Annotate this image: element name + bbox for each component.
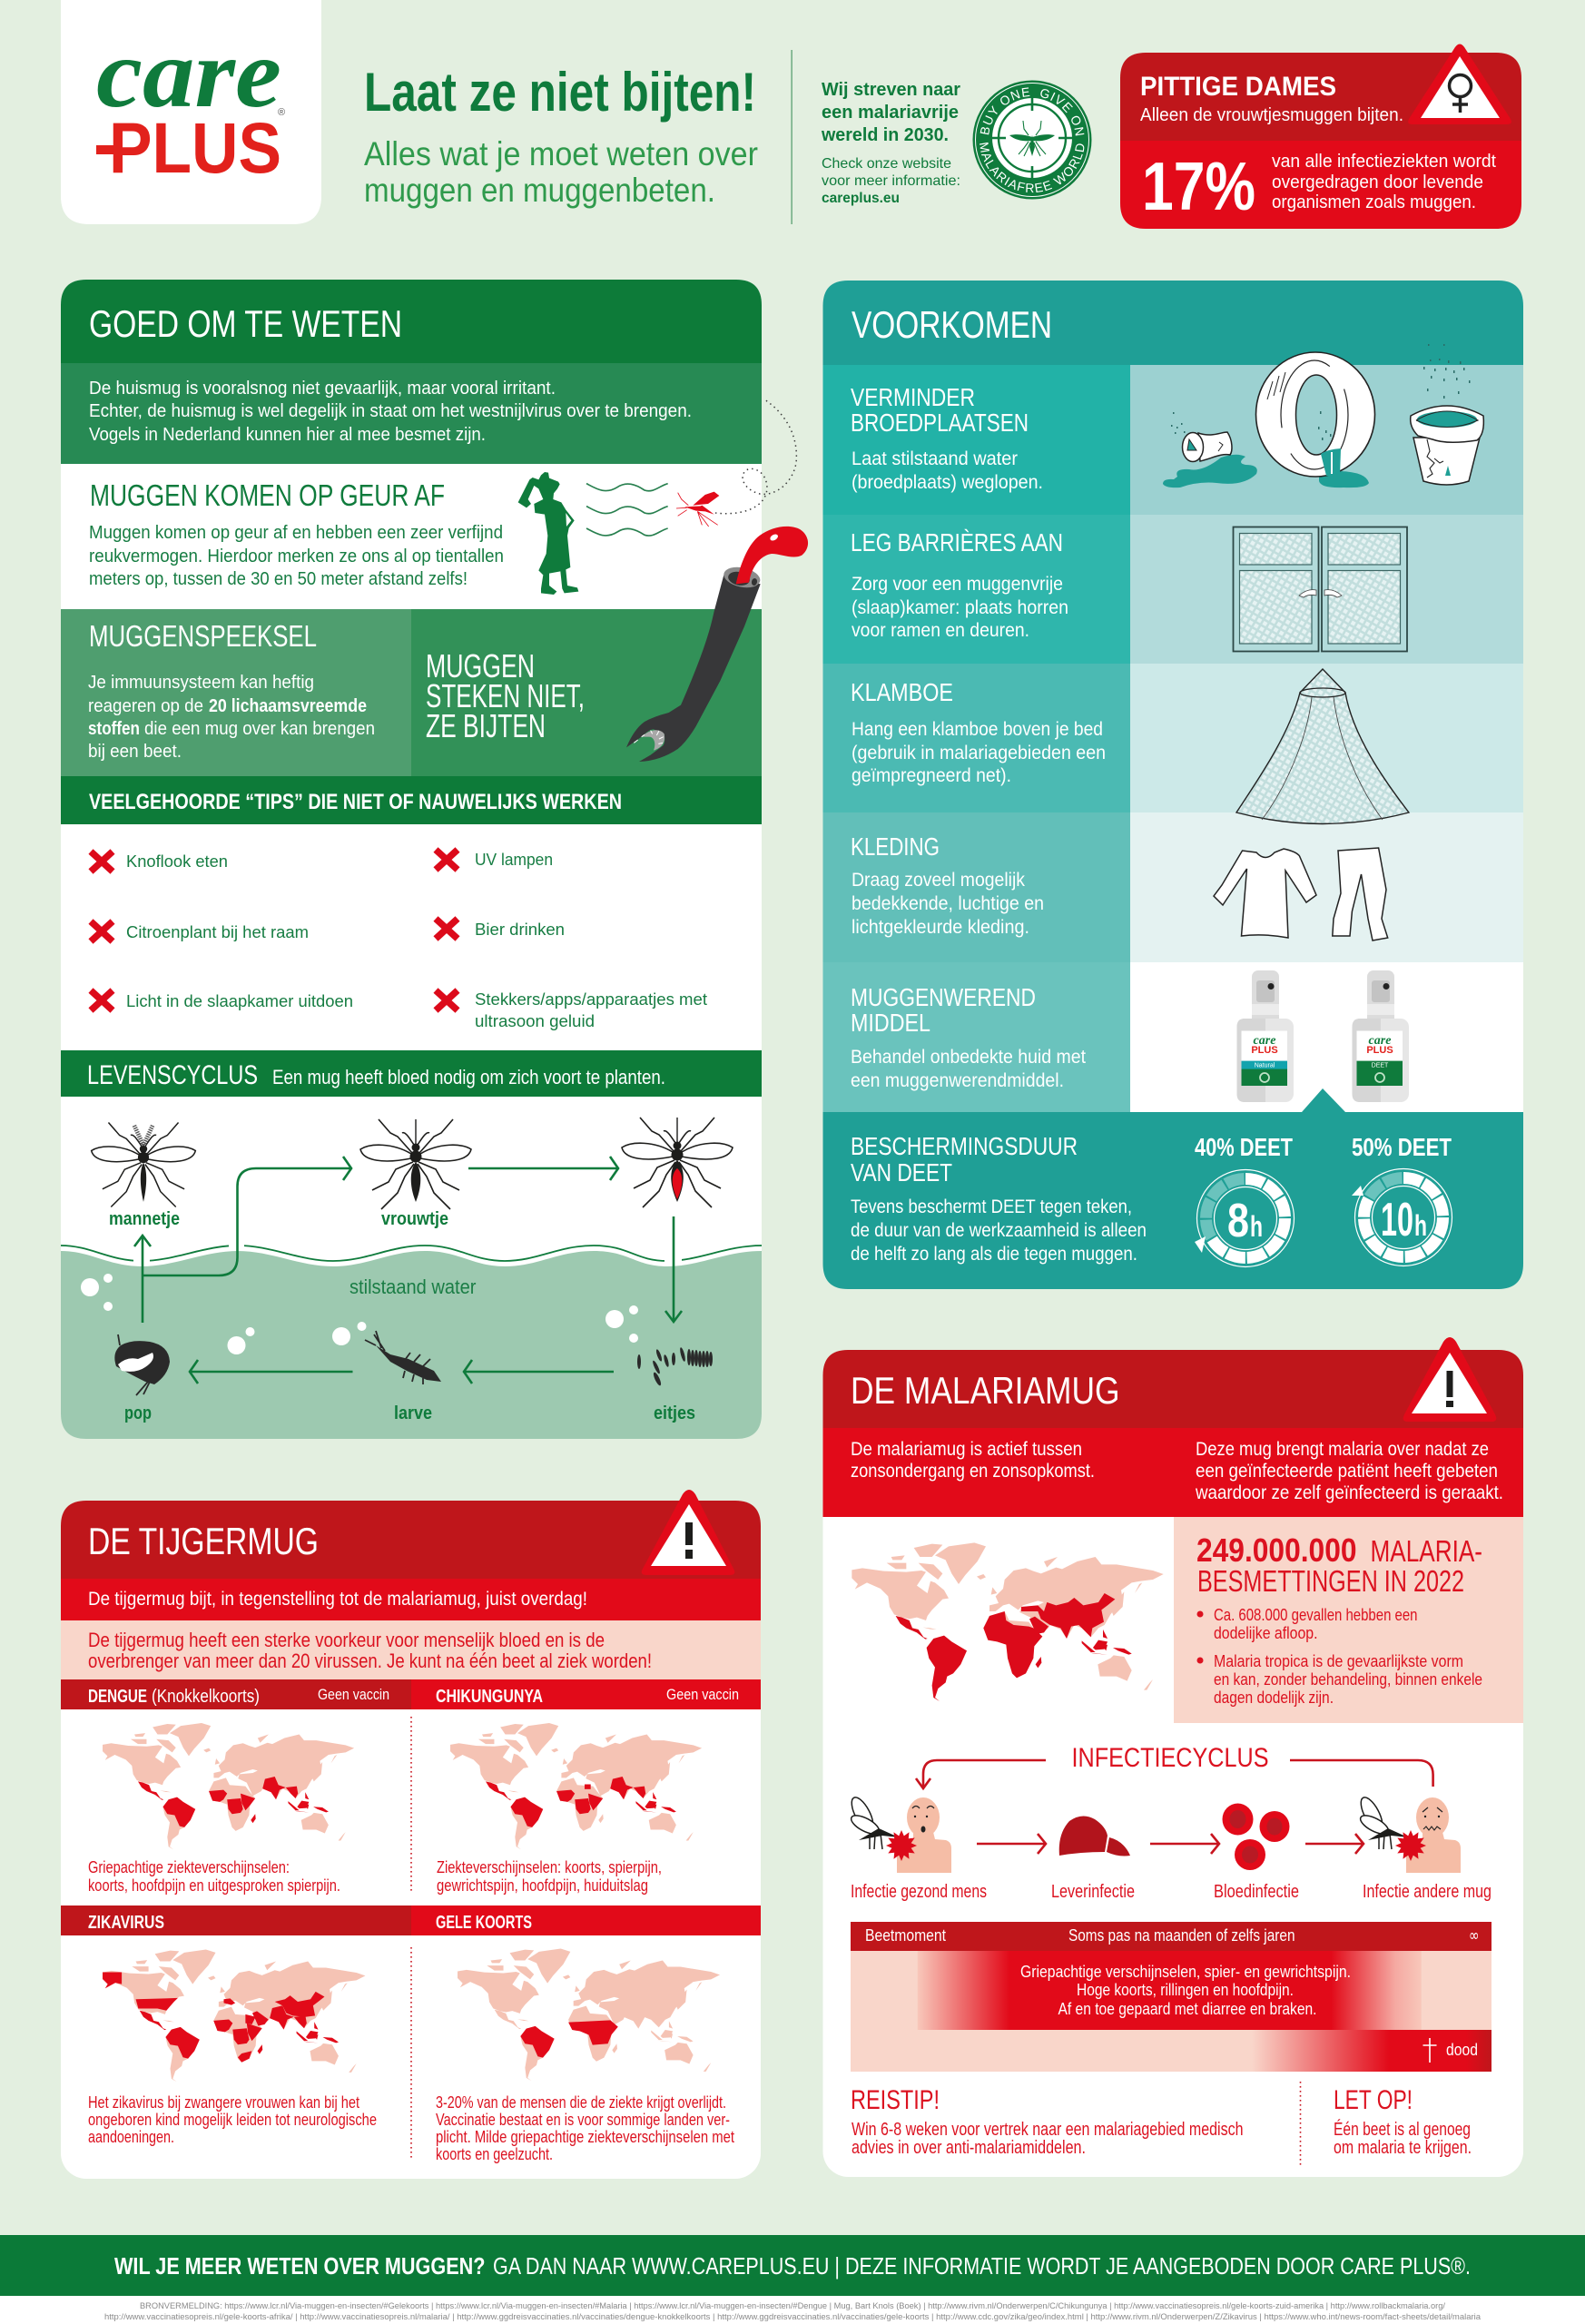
heading: veelgehoorde tips: VEELGEHOORDE “TIPS” DIE NIET OF NAUWELIJKS WERKEN: [89, 790, 622, 814]
disease header: dengue: DENGUE: [88, 1687, 147, 1707]
icon: red crosses: [91, 850, 458, 1010]
text: muggenspeeksel: Je immuunsysteem kan heftig: [88, 673, 314, 693]
stat: 249 million: 249.000.000: [1196, 1531, 1356, 1569]
timeline labels: [865, 1925, 1480, 2059]
text: transmission: [1195, 1439, 1503, 1503]
row: klamboe: geïmpregneerd net).: [852, 765, 1011, 786]
icon: female mosquito: [360, 1119, 471, 1209]
header subtitle: Alles wat je moet weten over: [364, 135, 758, 172]
icon: pupa: [114, 1334, 170, 1395]
icon: sick person bitten: [1357, 1795, 1461, 1873]
row: verminder broedplaatsen: VERMINDER: [851, 383, 975, 411]
text: zika description: aandoeningen.: [88, 2127, 174, 2146]
bullet list: Ca. 608.000 gevallen hebben een: [1214, 1605, 1418, 1624]
map: malaria: [852, 1542, 1164, 1701]
cycle labels: Infectie andere mug: [1363, 1882, 1491, 1902]
disease header: chikungunya: [411, 1679, 761, 1709]
disease header: zikavirus: [61, 1905, 411, 1935]
malaria-free mission text: wereld in 2030.: [821, 125, 949, 145]
malaria-free mission text: Wij streven naar: [822, 80, 960, 100]
list: ineffective tips: Stekkers/apps/apparaatjes met: [475, 990, 707, 1009]
timeline labels: Soms pas na maanden of zelfs jaren: [1068, 1925, 1295, 1945]
heading: de tijgermug: DE TIJGERMUG: [88, 1520, 319, 1562]
text: zika description: ongeboren kind mogelijk leiden tot neurologische: [88, 2110, 377, 2129]
intro text: Echter, de huismug is wel degelijk in staat om het westnijlvirus over te brengen.: [89, 401, 692, 421]
text: reistip: advies in over anti-malariamiddelen.: [852, 2138, 1086, 2158]
icon: blood-fed mosquito: [622, 1118, 733, 1207]
callout: muggen steken niet: MUGGEN: [426, 647, 535, 684]
panel: de malariamug: [822, 1337, 1523, 2177]
list: ineffective tips: Citroenplant bij het raam: [126, 922, 309, 941]
heading: let op: LET OP!: [1334, 2085, 1413, 2115]
text: muggenspeeksel: bij een beet.: [88, 742, 182, 762]
malaria-free mission text: careplus.eu: [822, 191, 900, 206]
subheading: levenscyclus: Een mug heeft bloed nodig om zich voort te planten.: [272, 1066, 665, 1088]
row: beschermingsduur: BESCHERMINGSDUUR: [851, 1132, 1078, 1160]
band: levenscyclus: [61, 1050, 762, 1097]
water surface line: [61, 1246, 762, 1261]
text: muggenspeeksel: stoffen: [88, 719, 140, 739]
bullet list: [1196, 1605, 1482, 1707]
icon: eggs: [637, 1347, 713, 1386]
bullet list: en kan, zonder behandeling, binnen enkele: [1214, 1669, 1482, 1689]
heading: infectiecyclus: INFECTIECYCLUS: [1071, 1743, 1269, 1773]
heading: malaria besmettingen: [1197, 1534, 1482, 1598]
disease header: gele koorts: GELE KOORTS: [436, 1913, 532, 1933]
row: kleding: Draag zoveel mogelijk: [852, 870, 1025, 891]
footer band: [0, 2235, 1585, 2296]
text: yellow fever description: 3-20% van de mensen die de ziekte krijgt overlijdt.: [436, 2093, 726, 2112]
row: klamboe: KLAMBOE: [851, 678, 953, 706]
gauge: 8 hours: 8: [1227, 1195, 1249, 1247]
band: tips heading: [61, 776, 762, 824]
label: mannetje: mannetje: [109, 1209, 180, 1229]
icon: repellent bottle deet: care: [1369, 1034, 1391, 1048]
gauge: 8 hours: h: [1250, 1210, 1263, 1243]
row: kleding: KLEDING: [851, 832, 940, 861]
header title: Laat ze niet bijten!: [364, 62, 756, 123]
icon: male mosquito: [92, 1122, 195, 1207]
gauge: 10 hours: 10: [1381, 1194, 1413, 1246]
malaria-free mission text: een malariavrije: [822, 103, 959, 123]
row: beschermingsduur: de duur van de werkzaamheid is alleen: [851, 1220, 1147, 1241]
text: reistip: [852, 2120, 1244, 2158]
text: yellow fever description: plicht. Milde griepachtige ziekteverschijnselen met: [436, 2127, 734, 2146]
text: geur: reukvermogen. Hierdoor merken ze ons al op tientallen: [89, 547, 504, 566]
list: ineffective tips: UV lampen: [475, 850, 553, 869]
map: dengue: [103, 1723, 354, 1849]
text: geur: Muggen komen op geur af en hebben een zeer verfijnd: [89, 523, 503, 543]
label: larve: larve: [394, 1403, 432, 1423]
text: yellow fever description: Vaccinatie bestaat en is voor sommige landen ver-: [436, 2110, 730, 2129]
header: logo card: [61, 0, 321, 224]
icon: malaria free world badge: [973, 80, 1091, 200]
text: voorkeur: De tijgermug heeft een sterke voorkeur voor menselijk bloed en is de: [88, 1629, 605, 1651]
text: voorkeur: overbrenger van meer dan 20 virussen. Je kunt na één beet al ziek worden!: [88, 1649, 652, 1672]
icon: repellent bottle natural: [1236, 970, 1294, 1102]
band: active hours: [822, 1428, 1523, 1517]
band: muggenspeeksel: [61, 609, 411, 776]
logo word PLUS: PLUS: [109, 107, 281, 188]
heading: voorkomen: VOORKOMEN: [852, 303, 1052, 346]
text: infectieziekten: overgedragen door levende: [1272, 172, 1483, 192]
text: muggenspeeksel: die een mug over kan brengen: [144, 719, 375, 739]
text: transmission: Deze mug brengt malaria over nadat ze: [1196, 1439, 1489, 1460]
text: dengue symptoms: [88, 1857, 340, 1895]
text: zika description: Het zikavirus bij zwangere vrouwen kan bij het: [88, 2093, 359, 2112]
text: geur: meters op, tussen de 30 en 50 meter afstand zelfs!: [89, 569, 468, 589]
bullet list: Malaria tropica is de gevaarlijkste vorm: [1214, 1651, 1463, 1670]
icon: warning sign: [1403, 1337, 1496, 1422]
text: transmission: een geïnfecteerde patiënt heeft gebeten: [1196, 1461, 1498, 1482]
text: transmission: waardoor ze zelf geïnfecteerd is geraakt.: [1195, 1482, 1503, 1503]
icon: repellent bottle deet: DEET: [1372, 1062, 1389, 1069]
bullet list: dodelijke afloop.: [1214, 1623, 1318, 1642]
icon: clothing: [1214, 848, 1388, 940]
row: verminder broedplaatsen: BROEDPLAATSEN: [851, 409, 1029, 437]
icon: repellent bottle deet: [1353, 970, 1409, 1102]
disease header: chikungunya: CHIKUNGUNYA: [436, 1687, 543, 1707]
heading: 50 percent deet: 50% DEET: [1352, 1133, 1452, 1161]
dotted flight path: [715, 399, 796, 514]
cycle labels: [851, 1882, 1491, 1902]
heading: levenscyclus: LEVENSCYCLUS: [87, 1060, 258, 1090]
malaria-free mission text: Check onze website: [822, 156, 951, 172]
timeline death band: [851, 2030, 1491, 2072]
icon: malaria free world badge: MALARIAFREE WORLD: [979, 142, 1084, 192]
panel: malaria stats: [1174, 1517, 1523, 1723]
row: verminder broedplaatsen: [822, 365, 1523, 515]
text: let op: [1334, 2119, 1472, 2158]
icon: window with screens: [1233, 527, 1407, 652]
text: infectieziekten: van alle infectieziekten wordt: [1272, 152, 1496, 172]
map: gele koorts: [458, 1948, 720, 2081]
logo word PLUS: ®: [278, 107, 285, 118]
timeline: [851, 1922, 1491, 2072]
list: ineffective tips: ultrasoon geluid: [475, 1011, 595, 1030]
callout: muggen steken niet: [426, 647, 585, 744]
logo word care: care: [96, 20, 281, 128]
text: active hours: zonsondergang en zonsopkomst.: [851, 1461, 1095, 1482]
disease header: zikavirus: ZIKAVIRUS: [88, 1913, 164, 1933]
timeline labels: Hoge koorts, rillingen en hoofdpijn.: [1077, 1980, 1294, 1999]
cycle labels: Bloedinfectie: [1214, 1882, 1299, 1902]
row: beschermingsduur: VAN DEET: [851, 1158, 952, 1187]
text: dengue symptoms: Griepachtige ziekteverschijnselen:: [88, 1857, 290, 1876]
arrow: [1150, 1834, 1219, 1854]
heading: 40 percent deet: 40% DEET: [1195, 1133, 1293, 1161]
icon: female warning sign: [1408, 44, 1511, 124]
callout: muggen steken niet: ZE BIJTEN: [426, 707, 546, 744]
footer white strip: [0, 2296, 1585, 2324]
label: pop: pop: [124, 1403, 152, 1423]
heading: malaria besmettingen: BESMETTINGEN IN 2022: [1197, 1564, 1464, 1598]
timeline symptoms band: [851, 1951, 1491, 2030]
malaria-free mission text: [821, 80, 960, 206]
disease header: dengue: Geen vaccin: [318, 1686, 389, 1703]
row: leg barrieres aan: [822, 515, 1523, 664]
text: geur: [89, 523, 504, 589]
icon: spilled cup and puddle: [1163, 432, 1257, 487]
text: infectieziekten: [1272, 152, 1496, 212]
row: kleding: [822, 812, 1523, 962]
label: eitjes: eitjes: [654, 1403, 695, 1423]
row: beschermingsduur: [822, 1088, 1523, 1289]
cycle labels: Leverinfectie: [1051, 1882, 1135, 1902]
row: leg barrieres aan: (slaap)kamer: plaats horren: [852, 597, 1068, 618]
sources: http://www.vaccinatiesopreis.nl/gele-koorts-afrika/ | http://www.vaccinatiesopreis.nl/malaria/ | http://www.ggdreisvaccinaties.nl/vaccinaties/dengue-knokkelkoorts | http://www.ggdreisvaccinaties.nl/vaccinaties/gele-koorts | http://www.cdc.gov/zika/geo/index.html | http://www.rivm.nl/Onderwerpen/Z/Zikavirus | https://www.who.int/news-room/fact-sheets/detail/malaria: [104, 2312, 1482, 2322]
header subtitle: [364, 135, 758, 209]
timeline labels: Beetmoment: [865, 1925, 946, 1945]
text: muggenspeeksel: reageren op de: [88, 696, 203, 716]
icon: cross: [1423, 2038, 1436, 2063]
text: yellow fever description: koorts en geelzucht.: [436, 2144, 553, 2163]
timeline labels: Griepachtige verschijnselen, spier- en gewrichtspijn.: [1020, 1962, 1351, 1981]
heading: reistip: REISTIP!: [851, 2085, 940, 2115]
text: voorkeur: [88, 1629, 652, 1672]
footer call to action: WIL JE MEER WETEN OVER MUGGEN?: [114, 2252, 485, 2280]
gauge: 8 hours: [1195, 1169, 1295, 1267]
text: infectieziekten: organismen zoals muggen.: [1272, 192, 1476, 212]
gauge: 10 hours: h: [1414, 1209, 1427, 1242]
row: beschermingsduur: de helft zo lang als die tegen muggen.: [851, 1244, 1137, 1265]
row: muggenwerend middel: een muggenwerendmiddel.: [851, 1070, 1064, 1091]
text: zika description: [88, 2093, 377, 2146]
icon: malaria free world badge: BUY ONE: [980, 87, 1029, 134]
icon: warning sign: [642, 1490, 734, 1575]
gauge: 10 hours: [1352, 1169, 1452, 1265]
disease header: dengue: (Knokkelkoorts): [152, 1687, 260, 1707]
row: kleding: bedekkende, luchtige en: [852, 893, 1044, 914]
disease header: gele koorts: [411, 1905, 761, 1935]
list: ineffective tips: Bier drinken: [475, 920, 565, 939]
map: zikavirus: [103, 1949, 365, 2082]
header band: [61, 1501, 761, 1579]
malaria-free mission text: voor meer informatie:: [822, 173, 960, 189]
text: dengue symptoms: koorts, hoofdpijn en uitgesproken spierpijn.: [88, 1876, 340, 1895]
icon: bed net: [1236, 669, 1409, 824]
text: muggenspeeksel: 20 lichaamsvreemde: [209, 696, 367, 716]
text: chikungunya symptoms: gewrichtspijn, hoofdpijn, huiduitslag: [437, 1876, 648, 1895]
band: overdag: [61, 1579, 761, 1620]
row: muggenwerend middel: Behandel onbedekte huid met: [851, 1047, 1086, 1068]
heading: pittige dames: PITTIGE DAMES: [1140, 72, 1336, 102]
timeline labels: ∞: [1469, 1926, 1480, 1945]
icon: sniffing person: [518, 472, 578, 595]
panel: de tijgermug: [61, 1490, 761, 2179]
row: muggenwerend middel: MUGGENWEREND: [851, 983, 1036, 1011]
icon: repellent bottle natural: PLUS: [1251, 1045, 1278, 1056]
icon: blood cells: [1222, 1803, 1289, 1870]
text: let op: om malaria te krijgen.: [1334, 2138, 1472, 2158]
timeline labels: dood: [1446, 2040, 1478, 2059]
text: active hours: [851, 1439, 1095, 1482]
text: reistip: Win 6-8 weken voor vertrek naar een malariagebied medisch: [852, 2120, 1244, 2140]
intro text: De huismug is vooralsnog niet gevaarlijk, maar vooral irritant.: [89, 379, 556, 399]
stat: 17 percent: 17%: [1142, 148, 1255, 224]
icon: healthy person bitten: [848, 1795, 951, 1873]
text: let op: Één beet is al genoeg: [1334, 2119, 1471, 2140]
icon: repellent bottle natural: care: [1254, 1034, 1275, 1048]
timeline labels: Af en toe gepaard met diarree en braken.: [1058, 1999, 1316, 2018]
row: leg barrieres aan: Zorg voor een muggenvrije: [852, 574, 1063, 595]
row: klamboe: (gebruik in malariagebieden een: [852, 743, 1106, 763]
row: beschermingsduur: Tevens beschermt DEET tegen teken,: [851, 1196, 1132, 1217]
map: chikungunya: [450, 1723, 702, 1849]
band: muggen bijten: [411, 609, 762, 776]
water area: [61, 1251, 762, 1439]
arrow: [1305, 1834, 1363, 1854]
header band: [822, 1350, 1523, 1428]
icon: tyre with water: [1256, 352, 1374, 487]
row: verminder broedplaatsen: Laat stilstaand water: [852, 448, 1018, 469]
label: vrouwtje: vrouwtje: [381, 1209, 448, 1229]
icon: repellent bottle natural: Natural: [1255, 1062, 1275, 1069]
icon: proboscis with blood: [626, 527, 808, 762]
list: ineffective tips: Knoflook eten: [126, 852, 228, 871]
row: leg barrieres aan: LEG BARRIÈRES AAN: [851, 528, 1063, 556]
bubbles: [81, 1274, 638, 1354]
text: muggenspeeksel: [88, 673, 375, 762]
row: klamboe: Hang een klamboe boven je bed: [852, 719, 1103, 740]
intro text: Vogels in Nederland kunnen hier al mee besmet zijn.: [89, 425, 486, 445]
text: chikungunya symptoms: [437, 1857, 662, 1895]
text: vrouwtjesmuggen: Alleen de vrouwtjesmuggen bijten.: [1140, 105, 1403, 125]
sources: [104, 2301, 1482, 2322]
header band: [61, 280, 762, 363]
intro band: [61, 363, 762, 464]
cycle return arrows: [916, 1760, 1433, 1788]
list: ineffective tips: Licht in de slaapkamer uitdoen: [126, 991, 353, 1010]
panel: voorkomen: [822, 281, 1523, 1289]
mosquito swarm dots: [1171, 344, 1471, 440]
row: muggenwerend middel: [822, 962, 1523, 1112]
band: voorkeur: [61, 1620, 761, 1679]
heading: de malariamug: DE MALARIAMUG: [851, 1369, 1120, 1412]
header subtitle: muggen en muggenbeten.: [364, 172, 715, 209]
icon: larva: [365, 1331, 441, 1384]
intro text: [89, 379, 692, 445]
icon: cracked pot with water: [1411, 406, 1483, 485]
row: muggenwerend middel: MIDDEL: [851, 1009, 930, 1037]
disease header: dengue: [61, 1679, 411, 1709]
sources: BRONVERMELDING: https://www.lcr.nl/Via-muggen-en-insecten/#Gelekoorts | https://www.lcr.nl/Via-muggen-en-insecten/#Malaria | https://www.lcr.nl/Via-muggen-en-insecten/#Dengue | Mug, Bart Knols (Boek) | http://www.rivm.nl/Onderwerpen/C/Chikungunya | http://www.vaccinatiesopreis.nl/gele-koorts-zuid-amerika | http://www.rollbackmalaria.org/: [140, 2301, 1445, 2311]
icon: liver: [1059, 1816, 1130, 1856]
icon: red mosquito: [676, 492, 719, 527]
callout: muggen steken niet: STEKEN NIET,: [426, 677, 585, 714]
icon: odour waves: [586, 484, 668, 536]
heading: malaria besmettingen: MALARIA-: [1371, 1534, 1482, 1568]
row: kleding: lichtgekleurde kleding.: [852, 917, 1029, 938]
timeline top band: [851, 1922, 1491, 1951]
panel: pittige dames: [1120, 44, 1521, 229]
cycle labels: Infectie gezond mens: [851, 1882, 987, 1902]
bullet list: dagen dodelijk zijn.: [1214, 1688, 1334, 1707]
row: leg barrieres aan: voor ramen en deuren.: [852, 620, 1029, 641]
icon: repellent bottle deet: PLUS: [1366, 1045, 1393, 1056]
row: verminder broedplaatsen: (broedplaats) weglopen.: [852, 472, 1043, 493]
panel: goed om te weten: [61, 280, 808, 1439]
text: yellow fever description: [436, 2093, 734, 2163]
label: stilstaand water: stilstaand water: [349, 1275, 476, 1298]
heading: muggenspeeksel: MUGGENSPEEKSEL: [89, 619, 317, 653]
row: klamboe: [822, 664, 1523, 812]
text: overdag: De tijgermug bijt, in tegenstelling tot de malariamug, juist overdag!: [88, 1589, 587, 1610]
list: ineffective tips: [126, 850, 707, 1030]
arrow: [977, 1834, 1046, 1854]
text: active hours: De malariamug is actief tussen: [851, 1439, 1082, 1460]
text: chikungunya symptoms: Ziekteverschijnselen: koorts, spierpijn,: [437, 1857, 662, 1876]
heading: goed om te weten: GOED OM TE WETEN: [89, 302, 402, 345]
disease header: chikungunya: Geen vaccin: [666, 1686, 739, 1703]
heading: muggen komen op geur af: MUGGEN KOMEN OP GEUR AF: [90, 478, 445, 512]
lifecycle arrows: [134, 1157, 682, 1384]
